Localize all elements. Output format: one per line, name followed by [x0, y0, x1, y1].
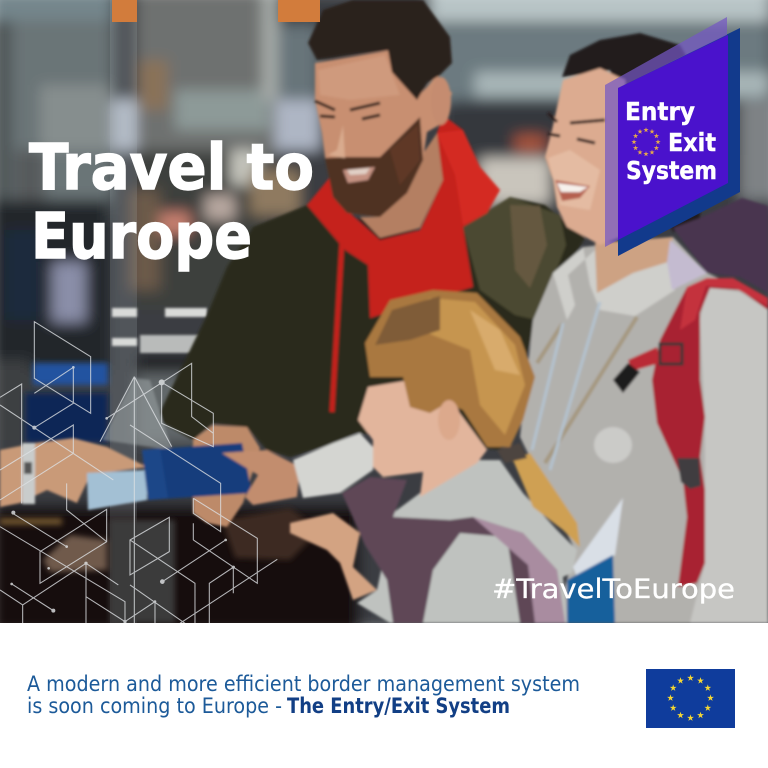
blue waiting chairs — [25, 363, 108, 443]
strap adjuster and clip — [628, 347, 660, 371]
man's face — [313, 48, 453, 160]
logo EU star ring — [631, 127, 661, 156]
man's hair — [308, 0, 452, 100]
caption text: is soon coming to Europe - — [27, 694, 282, 718]
circuit line pattern — [0, 322, 277, 623]
red backpack strap — [652, 278, 768, 587]
man's red hoodie — [307, 115, 500, 318]
girl's lower hand on counter — [290, 513, 377, 600]
girl's hand holding passport — [222, 450, 300, 505]
girl's ponytail — [513, 453, 580, 547]
man's beard — [325, 117, 423, 217]
blue document — [567, 555, 615, 623]
man's nose highlight — [328, 125, 345, 158]
man's ear — [438, 75, 453, 128]
light strips in background — [112, 308, 207, 353]
boarding pass — [573, 498, 623, 577]
man's jacket — [160, 197, 585, 457]
logo text — [625, 97, 717, 185]
orange signs at top — [112, 0, 320, 22]
girl's hair — [365, 290, 535, 447]
woman's hair — [562, 33, 700, 232]
man's black t-shirt neckline — [357, 218, 417, 240]
title — [29, 131, 314, 273]
woman's smile — [555, 180, 590, 201]
girl's grey hoodie — [357, 460, 577, 623]
logo text: System — [626, 156, 717, 185]
woman's eyes and brows — [548, 113, 605, 143]
man's neck — [360, 133, 443, 238]
left officer's arm and hand — [0, 438, 147, 507]
caption text: A modern and more efficient border management system — [27, 672, 580, 696]
girl's ear — [438, 400, 460, 440]
man's brows and eyes — [315, 101, 380, 119]
girl's vest — [342, 477, 565, 623]
man's hand behind passport — [193, 425, 260, 527]
hashtag: #TravelToEurope — [492, 574, 735, 605]
glass counter screen — [102, 378, 172, 450]
badge: Entry Exit System logo — [605, 17, 740, 256]
jacket olive shoulder — [463, 197, 566, 320]
woman's hoodie — [520, 237, 768, 623]
woman's neck — [595, 237, 673, 293]
woman's face — [545, 68, 625, 245]
caption text: The Entry/Exit System — [287, 694, 510, 718]
lavender patch — [667, 240, 707, 290]
hoodie sleeve highlight — [690, 288, 768, 623]
bracelet — [22, 443, 35, 504]
caption text — [27, 672, 580, 718]
logo text: Entry — [625, 97, 695, 126]
logo text: Exit — [668, 128, 716, 157]
bright patch on chest — [594, 427, 632, 463]
man's mouth — [343, 167, 375, 183]
girl's sleeve on arm — [293, 433, 373, 498]
hoodie drawstring — [332, 242, 342, 412]
EU flag — [646, 669, 735, 728]
hood collar — [553, 247, 675, 320]
glass pillar — [110, 0, 137, 623]
title: Travel to — [29, 131, 314, 204]
jacket tan patch — [510, 205, 547, 288]
counter reflections — [0, 508, 320, 623]
blue passport — [159, 442, 252, 500]
title: Europe — [31, 200, 252, 273]
document under passport — [87, 470, 147, 510]
hoodie zipper tapes and strings — [537, 317, 637, 463]
girl's face — [358, 380, 487, 497]
